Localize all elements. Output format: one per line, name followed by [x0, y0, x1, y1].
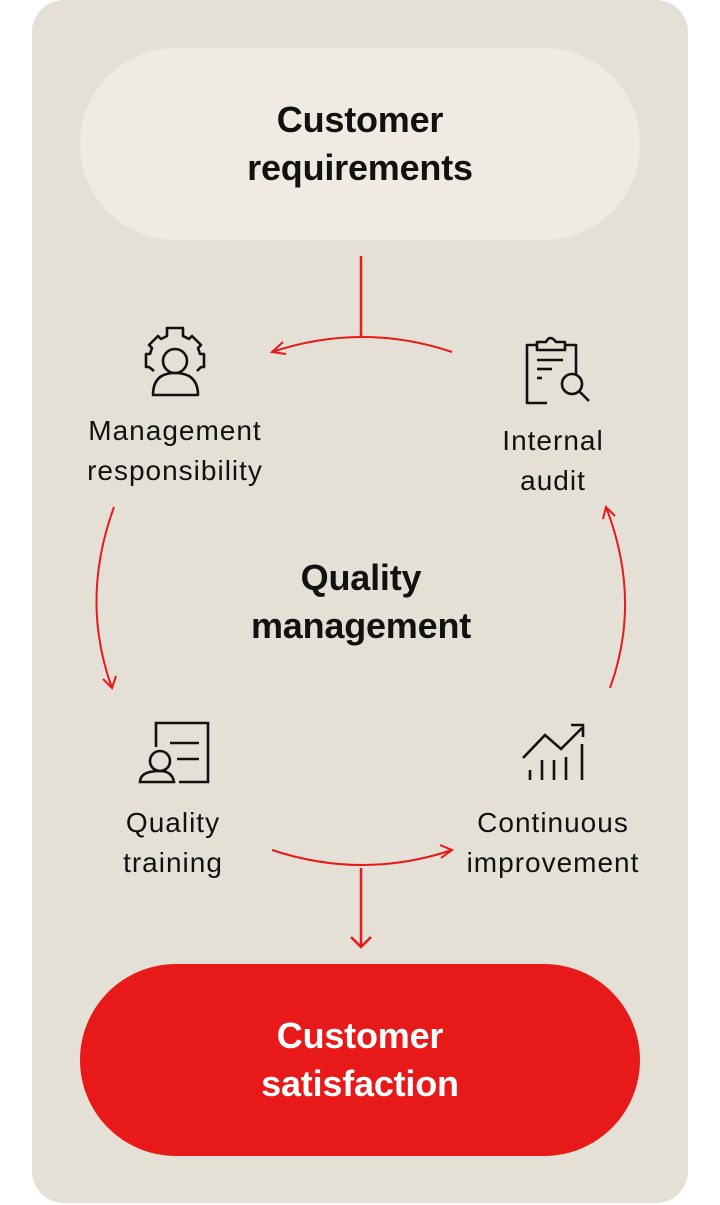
label: management responsibility: Management: [88, 415, 262, 446]
bottom pill: customer satisfaction: Customer: [277, 1015, 443, 1056]
icon: gear person: [146, 328, 204, 395]
center title: [251, 557, 471, 646]
label: continuous improvement: Continuous: [477, 807, 629, 838]
icon: clipboard magnifier: [527, 338, 589, 403]
arrow: right up: [603, 507, 625, 688]
top pill: customer requirements: [80, 48, 640, 240]
label: internal audit: [502, 425, 604, 496]
arrow: bottom right: [272, 845, 452, 865]
top pill: customer requirements: Customer: [277, 99, 443, 140]
label: quality training: [123, 807, 223, 878]
arrow: output down: [351, 868, 371, 947]
label: quality training: Quality: [126, 807, 220, 838]
label: quality training: training: [123, 847, 223, 878]
center title: Quality: [301, 557, 421, 598]
center title: management: [251, 605, 471, 646]
label: management responsibility: responsibility: [87, 455, 263, 486]
bottom pill: customer satisfaction: [80, 964, 640, 1156]
top pill: customer requirements: requirements: [247, 147, 473, 188]
arrow: top input: [272, 256, 452, 354]
label: continuous improvement: [467, 807, 639, 878]
label: internal audit: Internal: [502, 425, 604, 456]
label: continuous improvement: improvement: [467, 847, 639, 878]
arrow: left down: [96, 507, 116, 688]
icon: growth chart: [523, 725, 583, 780]
bottom pill: customer satisfaction: satisfaction: [261, 1063, 459, 1104]
icon: training: [140, 723, 208, 782]
label: management responsibility: [87, 415, 263, 486]
label: internal audit: audit: [520, 465, 586, 496]
